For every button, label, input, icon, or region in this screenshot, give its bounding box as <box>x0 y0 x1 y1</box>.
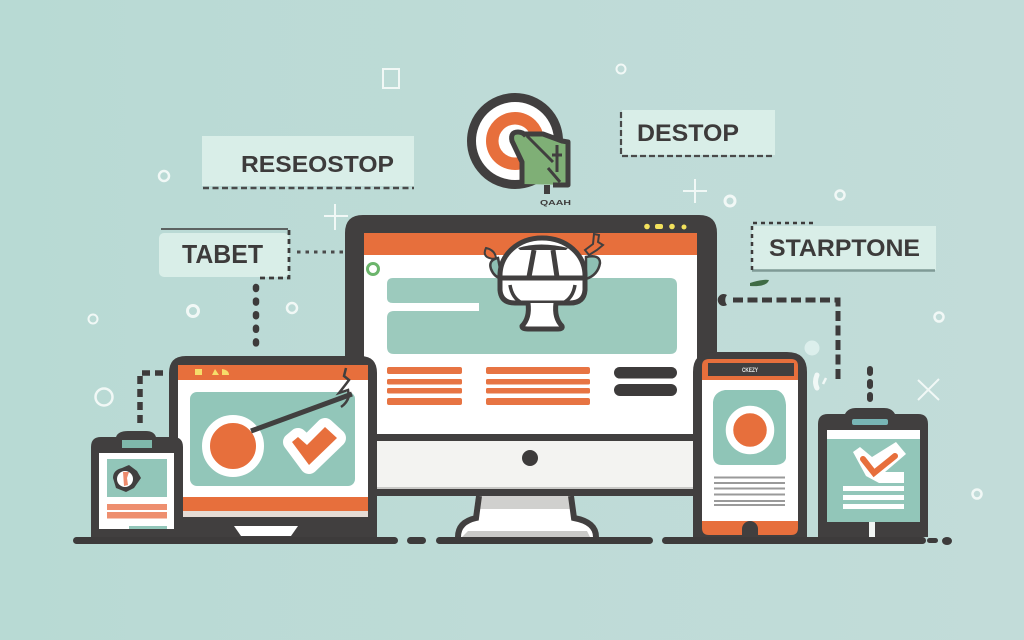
monitor power button <box>522 450 538 466</box>
label: STARPTONE <box>750 223 936 286</box>
phone home button <box>742 521 758 537</box>
phone footer <box>702 521 798 535</box>
laptop arrow tip <box>339 368 349 407</box>
laptop arrow stroke <box>251 394 352 431</box>
monitor orange text lines <box>387 367 590 405</box>
monitor chin <box>364 441 693 489</box>
decorative white glyphs <box>88 64 982 498</box>
label: RESEOSTOP <box>202 136 414 188</box>
left tablet icon <box>113 465 141 492</box>
label: TABET <box>159 229 289 278</box>
laptop orange circle <box>206 419 260 473</box>
connector: to right tablet <box>867 369 873 406</box>
connector: tablet label to monitor <box>297 250 347 254</box>
right tablet check mark <box>853 442 906 483</box>
right tablet lines <box>843 486 904 509</box>
connector: small tablet to laptop <box>140 373 163 424</box>
laptop content panel <box>190 392 355 486</box>
label: STARPTONE: STARPTONE <box>769 235 920 262</box>
right tablet <box>818 408 928 537</box>
left tablet image <box>107 459 167 497</box>
phone <box>693 352 807 537</box>
laptop indicator marks <box>195 369 229 375</box>
label: DESTOP <box>621 110 775 156</box>
baseline <box>73 537 952 545</box>
laptop check mark <box>292 427 337 465</box>
laptop screen <box>178 365 368 517</box>
phone image panel <box>713 390 786 465</box>
monitor green ring <box>368 264 378 274</box>
connector: tablet label to laptop <box>253 287 259 345</box>
phone header <box>702 359 798 380</box>
laptop hinge notch <box>234 526 298 536</box>
laptop <box>169 356 377 537</box>
phone orange circle <box>730 410 770 450</box>
monitor title bar <box>364 233 697 255</box>
icon: globe dome on stand <box>485 234 603 329</box>
monitor screen <box>364 233 697 434</box>
monitor <box>345 215 717 496</box>
phone text lines <box>714 478 785 505</box>
connector end mark <box>718 294 727 306</box>
label: DESTOP: DESTOP <box>637 120 739 147</box>
icon: target with hand: QAAH <box>540 200 571 207</box>
phone screen <box>702 380 798 522</box>
right tablet screen <box>827 430 920 522</box>
connector: starptone label to phone <box>733 300 838 382</box>
label: TABET: TABET <box>182 239 263 269</box>
monitor indicator dots <box>644 224 686 230</box>
right tablet pill <box>852 419 888 425</box>
icon: target with hand <box>472 98 571 207</box>
right tablet stand stroke <box>869 522 875 537</box>
left tablet lines <box>107 504 167 510</box>
label: RESEOSTOP: RESEOSTOP <box>241 151 394 177</box>
monitor dark buttons <box>614 367 677 396</box>
laptop footer bar <box>183 497 368 511</box>
left tablet pill <box>122 440 152 448</box>
small left tablet <box>91 431 183 537</box>
monitor stand <box>458 496 597 537</box>
left tablet screen <box>99 453 174 529</box>
laptop title bar <box>178 365 368 380</box>
monitor content panel <box>387 278 677 354</box>
phone: CKEZY <box>742 368 758 374</box>
